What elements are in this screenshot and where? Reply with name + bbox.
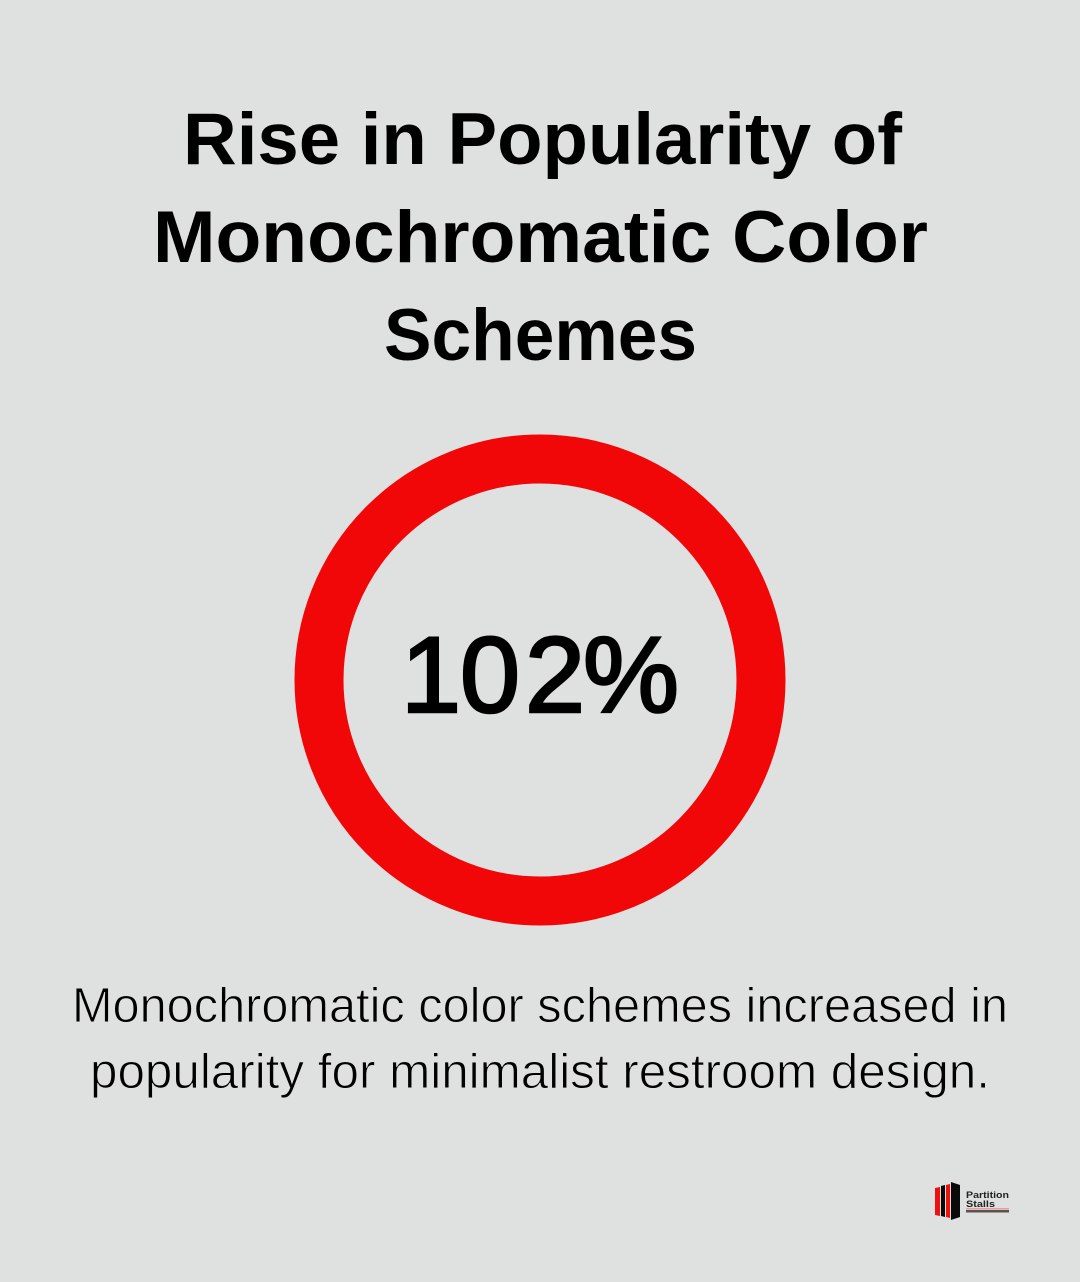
logo: Partition Stalls (935, 1182, 1009, 1220)
percentage value: 102% (401, 614, 679, 735)
logo: Partition Stalls: Partition (966, 1190, 1009, 1201)
description text: Monochromatic color schemes increased in (72, 979, 1008, 1033)
title: Rise in Popularity of (183, 99, 903, 180)
ring chart (319, 459, 761, 901)
logo: Partition Stalls: Stalls (966, 1199, 995, 1210)
title: Monochromatic Color (153, 197, 928, 278)
title: Schemes (384, 295, 697, 376)
description text (72, 979, 1008, 1099)
description text: popularity for minimalist restroom design. (90, 1045, 990, 1099)
title (153, 99, 928, 376)
